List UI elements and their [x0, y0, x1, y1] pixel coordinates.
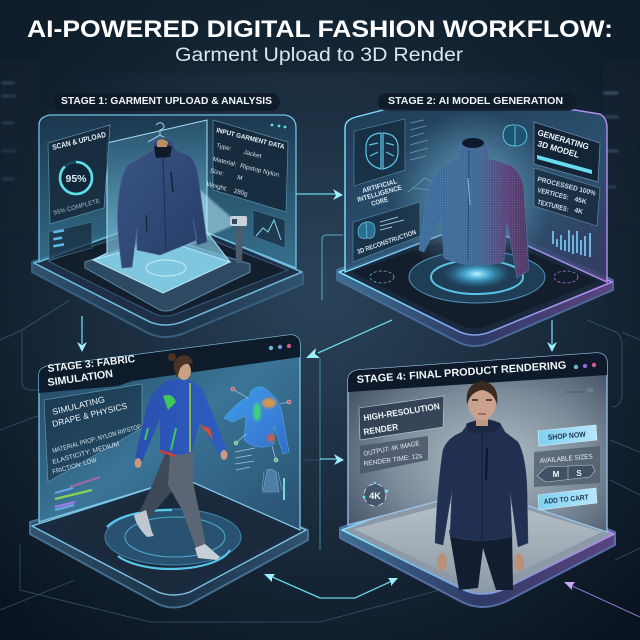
garment data rows: 280g [233, 188, 249, 198]
stage 1 platform [32, 215, 303, 337]
garment data rows: Material: [212, 156, 237, 168]
jacket: 3d mesh [419, 138, 529, 278]
small status bars [49, 222, 92, 260]
jacket [435, 419, 528, 547]
progress label: 95% COMPLETE [53, 198, 101, 217]
stage 4 floor [354, 496, 602, 590]
window dots [269, 344, 291, 350]
icon: brain [366, 133, 398, 169]
title [27, 16, 613, 66]
heat map callout dots [231, 387, 291, 462]
size selector: S [576, 469, 582, 478]
corner status [566, 388, 593, 393]
panel: output stats [360, 436, 428, 474]
garment data rows: M [236, 174, 243, 182]
button: shop now: SHOP NOW [547, 430, 587, 442]
garment data rows [206, 142, 284, 204]
icon: hanger [148, 123, 172, 142]
panel: model stats: 45K [574, 196, 587, 206]
stage 4 heading: STAGE 4: FINAL PRODUCT RENDERING [356, 359, 567, 386]
circuit connector lines [0, 300, 640, 622]
icon: floating brain [503, 125, 527, 146]
panel: model stats: 4K [574, 207, 584, 216]
jacket body [135, 378, 227, 462]
legs [449, 530, 513, 590]
heading: scan and upload: SCAN & UPLOAD [51, 130, 107, 152]
panel: input garment data [206, 120, 288, 212]
stage 3 platform [30, 478, 308, 608]
connector list [408, 120, 432, 192]
stage 1 back glass panel [39, 115, 296, 268]
material properties: ELASTICITY: MEDIUM [52, 441, 120, 466]
stage 3 heading: STAGE 3: FABRIC [47, 353, 136, 375]
panel: available sizes [534, 446, 600, 487]
material properties: FRICTION: LOW [52, 457, 99, 476]
panel: high-resolution render: RENDER [363, 422, 399, 437]
stage 1 hologram frame [93, 120, 230, 262]
stage 4 back glass panel [348, 353, 607, 532]
stage 2 label [378, 93, 577, 111]
heading: generating 3d model: GENERATING [536, 127, 590, 152]
heat map jacket [224, 387, 291, 462]
small jacket sketch [235, 448, 285, 500]
progress ring: 95% [65, 173, 87, 185]
heading: input garment data: INPUT GARMENT DATA [216, 127, 285, 151]
garment data rows: Size: [209, 167, 225, 178]
panel: stage 2 ai model generation [337, 93, 613, 346]
size selector: M [553, 470, 560, 479]
stage 2 back glass panel [345, 110, 607, 282]
hands [437, 553, 447, 571]
head and hair [177, 362, 191, 380]
jacket: navy [118, 138, 207, 268]
floor rings [370, 251, 578, 303]
stage 1 label [53, 93, 280, 111]
arrow: stage 3 bottom input [264, 574, 320, 598]
button: add to cart: ADD TO CART [543, 492, 590, 506]
model in final jacket [435, 381, 528, 590]
panel: model stats [534, 168, 600, 226]
panel: high-resolution render: HIGH-RESOLUTION [363, 401, 440, 423]
floor rings [105, 509, 241, 569]
core label: ARTIFICIAL [362, 178, 398, 195]
icon: 4k badge: 4K [369, 491, 381, 501]
garment data rows: Ripstop Nylon [239, 163, 280, 179]
panel: stage 4 final product rendering [340, 353, 615, 607]
panel: output stats: OUTPUT: 4K IMAGE [363, 440, 421, 458]
stage 3 header [39, 335, 300, 393]
heading: simulating drape: SIMULATING [51, 394, 106, 417]
panel window dots [271, 124, 286, 128]
stage 3 heading [47, 353, 136, 389]
stage 2 platform [337, 218, 613, 346]
arrow: purple return [564, 582, 640, 617]
icon: scanner [230, 216, 247, 263]
title line 1: AI-POWERED DIGITAL FASHION WORKFLOW: [27, 16, 613, 43]
garment data rows: Type: [216, 142, 232, 153]
panel: stage 3 fabric simulation [30, 335, 308, 608]
panel: model stats: TEXTURES: [537, 199, 569, 214]
panel: simulating drape and physics: DRAPE & PHYSICS [51, 401, 128, 429]
hands [134, 458, 142, 468]
panel: 3d reconstruction [353, 202, 420, 262]
panel: ai core [354, 119, 432, 208]
panel: generating 3d model [534, 122, 600, 182]
core label: INTELLIGENCE [357, 184, 403, 204]
panel: scan and upload [48, 125, 110, 260]
core label [357, 178, 403, 208]
stage 3 heading: SIMULATION [47, 368, 114, 389]
arrow: stage 1 to stage 2 [296, 189, 343, 200]
back leg [139, 452, 192, 518]
shoes [134, 510, 154, 537]
arrow: stage 1 to stage 3 [77, 316, 87, 352]
neck [476, 414, 488, 426]
heading: 3d reconstruction: 3D RECONSTRUCTION [356, 229, 417, 256]
stage 4 platform [340, 478, 615, 607]
material properties: MATERIAL PROP: NYLON RIPSTOP [52, 424, 142, 455]
head [468, 386, 496, 420]
panel: generating 3d model: 3D MODEL [536, 138, 581, 160]
panel: high-resolution render [359, 396, 444, 440]
stage 4 header [348, 353, 607, 392]
panel: stage 1 garment upload and analysis [32, 93, 303, 337]
panel: output stats: RENDER TIME: 12s [363, 453, 423, 468]
progress bar [537, 155, 592, 174]
material properties [52, 424, 142, 476]
panel: simulating drape and physics [44, 384, 142, 510]
stage 1 label: STAGE 1: GARMENT UPLOAD & ANALYSIS [61, 96, 272, 107]
property bars [55, 477, 100, 510]
scanner beam [186, 188, 232, 246]
size selector [537, 465, 595, 482]
core label: CORE [371, 196, 389, 208]
stage 2 label: STAGE 2: AI MODEL GENERATION [388, 96, 563, 107]
arrow: stage 2 to stage 3 [306, 235, 392, 358]
window dots [574, 363, 596, 369]
stage 1 pedestal [85, 236, 250, 311]
icon: 4k badge [362, 482, 388, 506]
garment data rows: Jacket [243, 149, 262, 160]
panel: available sizes: AVAILABLE SIZES [540, 453, 593, 465]
subtitle: Garment Upload to 3D Render [175, 45, 464, 66]
server racks background [0, 0, 640, 235]
panel: model stats: VERTICES: [537, 187, 569, 202]
bar chart [552, 230, 591, 257]
face [472, 399, 492, 401]
panel: model stats: PROCESSED 100% [537, 176, 596, 197]
button: shop now [538, 425, 597, 446]
icon: small brain [358, 222, 375, 238]
garment data rows: Weight: [206, 181, 228, 193]
arrow: stage 2 to stage 4 [547, 320, 557, 352]
hair [467, 381, 497, 405]
stage 2 jacket backlight [393, 110, 553, 280]
button: add to cart [538, 488, 597, 510]
line chart [253, 210, 285, 248]
woman walking in simulated jacket [134, 353, 228, 560]
front leg [168, 450, 206, 548]
arrow: stage 4 bottom input [320, 578, 398, 598]
stage 3 back glass panel [39, 335, 300, 530]
arrow: stage 3 to stage 4 [320, 358, 344, 550]
